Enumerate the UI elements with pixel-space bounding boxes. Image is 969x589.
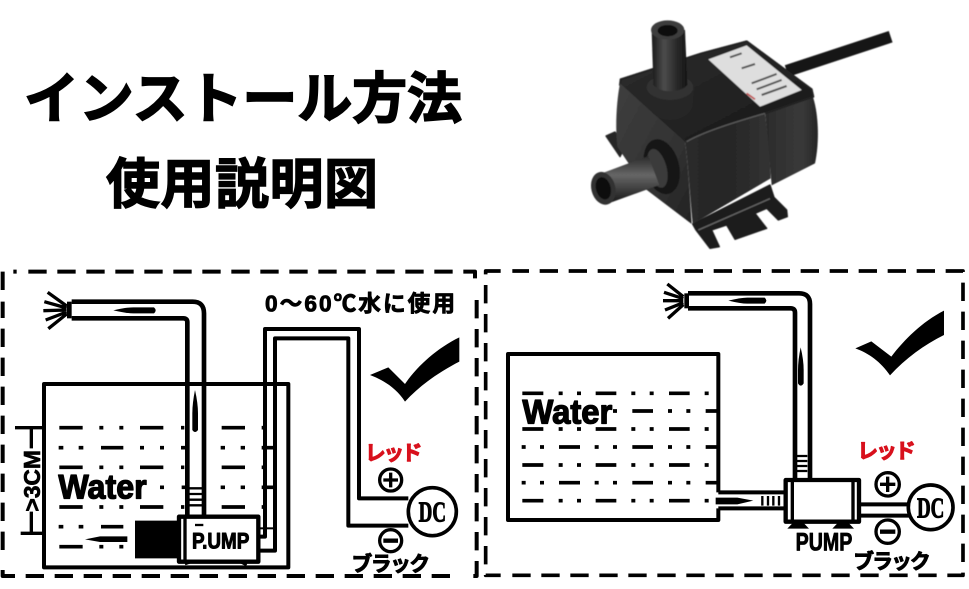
- power cable loop: [258, 329, 408, 551]
- power cable: [859, 504, 911, 516]
- pump box: [179, 517, 258, 565]
- check mark: [855, 311, 944, 375]
- pump top face: [620, 41, 813, 142]
- panel: submerged installation: [3, 272, 477, 576]
- specification label: [708, 45, 802, 107]
- pump left face: [616, 83, 692, 224]
- depth marker: more than 3 cm: >3CM: [19, 450, 45, 512]
- DC power source: [908, 485, 953, 530]
- text: water temperature: 0～60℃水に使用: [265, 291, 455, 317]
- intake filter block: [135, 521, 178, 558]
- check mark: [370, 337, 459, 402]
- flow arrow: vertical: [798, 347, 804, 386]
- flow arrow: horizontal: [113, 307, 156, 313]
- panel: external installation: [486, 271, 963, 575]
- water level dashes: [522, 393, 717, 501]
- outlet hose: [688, 293, 810, 480]
- pump rear body: [765, 93, 818, 185]
- DC power source: [408, 488, 456, 536]
- label: red wire: レッド: [365, 442, 422, 465]
- subtitle: usage diagram: 使用説明図: [106, 155, 378, 215]
- label: red wire: レッド: [857, 440, 916, 463]
- title: installation method: インストール方法: [24, 68, 462, 130]
- DC power source: DC: [917, 493, 944, 524]
- product photo: submersible pump: [587, 20, 891, 248]
- depth marker: more than 3 cm: [15, 428, 45, 533]
- submerged outlet hose: [72, 302, 204, 517]
- inlet arrow: [716, 498, 753, 504]
- mounting foot: [693, 185, 787, 248]
- power cable: [787, 37, 891, 71]
- label: PUMP: PUMP: [796, 530, 852, 557]
- plus terminal: [876, 473, 899, 496]
- side inlet nozzle: [587, 135, 686, 208]
- dashed frame: [486, 271, 963, 575]
- inlet arrow: [85, 536, 127, 542]
- label: black wire: ブラック: [352, 552, 430, 576]
- plus terminal: [380, 469, 402, 491]
- label: black wire: ブラック: [853, 549, 931, 573]
- flow arrow: horizontal: [728, 298, 766, 304]
- inlet hose: [716, 492, 786, 508]
- pump front face: [685, 113, 771, 224]
- rear mounting tab: [606, 132, 625, 157]
- DC power source: DC: [419, 498, 446, 529]
- spray nozzle: [43, 292, 69, 329]
- water tank: [44, 384, 288, 567]
- pump box: P.UMP: [192, 528, 249, 553]
- pump box: [786, 480, 859, 529]
- minus terminal: [380, 530, 402, 552]
- top outlet nozzle: [647, 20, 694, 120]
- label: Water: Water: [58, 468, 147, 506]
- flow arrow: vertical: [192, 390, 198, 432]
- spray nozzle: [663, 284, 687, 318]
- water tank: [508, 354, 718, 520]
- label: Water: Water: [522, 393, 612, 431]
- water level dashes: [59, 428, 273, 547]
- dashed frame: [3, 272, 477, 576]
- minus terminal: [876, 520, 899, 543]
